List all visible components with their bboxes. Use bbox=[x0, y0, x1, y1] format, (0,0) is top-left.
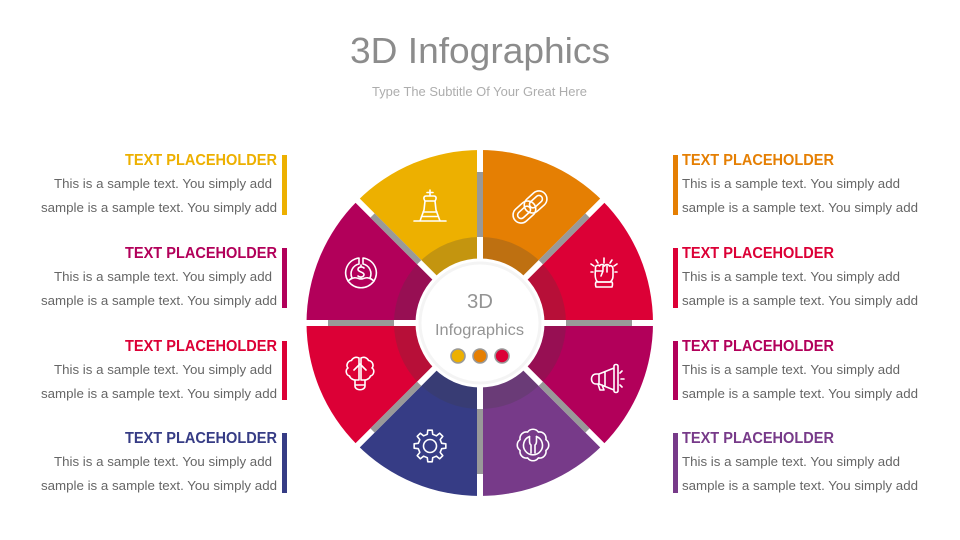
icon: chess king bbox=[414, 190, 446, 221]
icon: chain link bbox=[510, 188, 550, 226]
white gaps bbox=[302, 145, 658, 501]
text block: right 4 bbox=[673, 430, 918, 493]
text block: right 3: This is a sample text. You simply add bbox=[682, 362, 900, 377]
text block: right 2 bbox=[673, 245, 918, 308]
text block: left 1 bbox=[41, 152, 287, 215]
icon: brain bulb bbox=[346, 357, 374, 390]
title: 3D Infographics bbox=[350, 30, 610, 71]
text block: right 1 bbox=[673, 152, 918, 215]
text block: left 3: TEXT PLACEHOLDER bbox=[125, 338, 277, 355]
text block: left 1: sample is a sample text. You simply add bbox=[41, 200, 277, 215]
center hub bbox=[416, 258, 544, 388]
segment: magenta right bbox=[480, 323, 653, 445]
text block: left 1: This is a sample text. You simply add bbox=[54, 176, 272, 191]
text block: right 3: sample is a sample text. You simply add bbox=[682, 386, 918, 401]
text block: left 2: sample is a sample text. You simply add bbox=[41, 293, 277, 308]
text block: left 3 bbox=[41, 338, 287, 401]
text block: right 4: TEXT PLACEHOLDER bbox=[682, 430, 834, 447]
text block: right 3: TEXT PLACEHOLDER bbox=[682, 338, 834, 355]
text block: right 2: sample is a sample text. You simply add bbox=[682, 293, 918, 308]
text block: right 2: This is a sample text. You simply add bbox=[682, 269, 900, 284]
segment: blue bbox=[358, 323, 480, 496]
icon: money target bbox=[346, 258, 376, 288]
center hub: Infographics bbox=[435, 322, 524, 339]
subtitle: Type The Subtitle Of Your Great Here bbox=[372, 84, 587, 99]
icon: raised fist bbox=[591, 258, 617, 287]
circular 3D wheel bbox=[302, 145, 658, 501]
text block: right 1: This is a sample text. You simply add bbox=[682, 176, 900, 191]
text block: left 2 bbox=[41, 245, 287, 308]
text block: right 4: sample is a sample text. You simply add bbox=[682, 478, 918, 493]
segment: orange bbox=[480, 150, 602, 323]
icon: wrench gear bbox=[517, 429, 549, 461]
text block: left 2: This is a sample text. You simply add bbox=[54, 269, 272, 284]
text block: left 2: TEXT PLACEHOLDER bbox=[125, 245, 277, 262]
center hub: 3D bbox=[467, 291, 493, 313]
text block: right 1: sample is a sample text. You simply add bbox=[682, 200, 918, 215]
text block: left 1: TEXT PLACEHOLDER bbox=[125, 152, 277, 169]
segment: magenta left bbox=[306, 201, 480, 323]
text block: right 2: TEXT PLACEHOLDER bbox=[682, 245, 834, 262]
text block: left 3: This is a sample text. You simply add bbox=[54, 362, 272, 377]
text block: right 1: TEXT PLACEHOLDER bbox=[682, 152, 834, 169]
grey gap shadows bbox=[328, 172, 632, 474]
text block: right 3 bbox=[673, 338, 918, 401]
text block: left 4: This is a sample text. You simply add bbox=[54, 454, 272, 469]
text block: left 3: sample is a sample text. You simply add bbox=[41, 386, 277, 401]
text block: right 4: This is a sample text. You simply add bbox=[682, 454, 900, 469]
text block: left 4: TEXT PLACEHOLDER bbox=[125, 430, 277, 447]
icon: megaphone bbox=[592, 364, 624, 392]
inner shaded ring bbox=[394, 237, 566, 409]
segment: red top right bbox=[480, 201, 653, 323]
text block: left 4: sample is a sample text. You simply add bbox=[41, 478, 277, 493]
text block: left 4 bbox=[41, 430, 287, 493]
segment: purple bbox=[480, 323, 602, 496]
icon: gear bbox=[414, 430, 446, 462]
segment: red left bbox=[306, 323, 480, 445]
segment: yellow bbox=[358, 150, 480, 323]
